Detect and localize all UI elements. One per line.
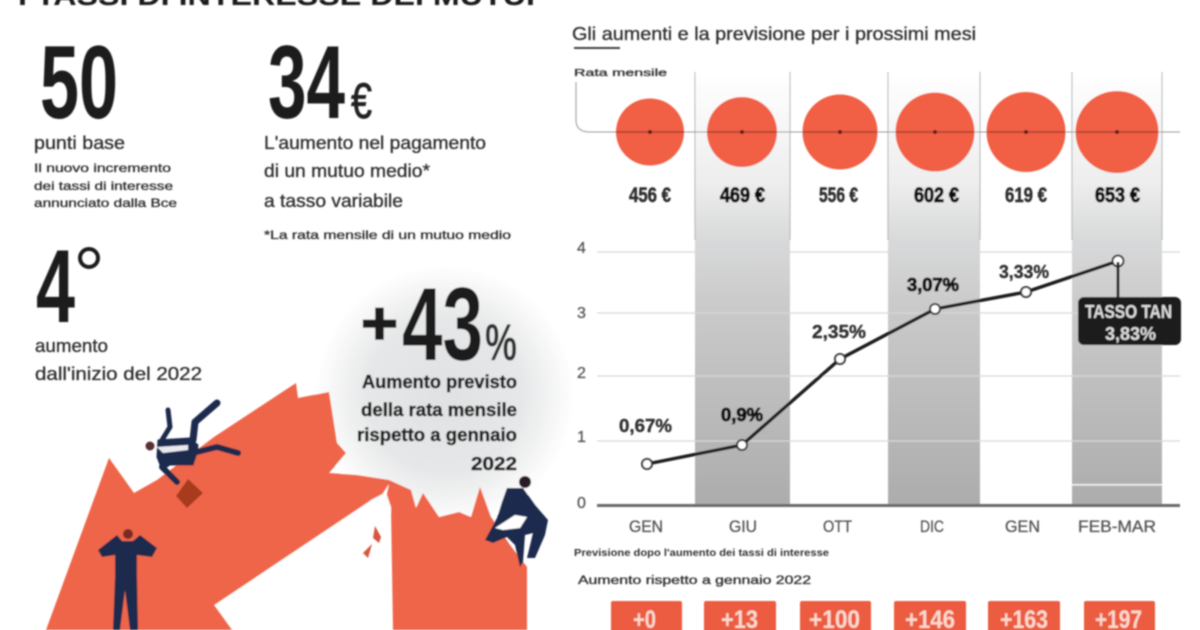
stat: 34 euro: L'aumento nel pagamento	[264, 133, 486, 153]
line chart: 2	[577, 365, 586, 382]
month labels: GEN	[629, 517, 663, 536]
stat: plus 43 percent: +	[361, 290, 398, 357]
line chart: 3,07%	[907, 275, 959, 295]
stat: 34 euro: a tasso variabile	[264, 191, 403, 211]
stat: plus 43 percent: 43	[402, 267, 483, 383]
stat: 50 basis points	[34, 25, 177, 210]
payment values: 556 €	[819, 184, 858, 207]
stat: 50 basis points: Il nuovo incremento	[34, 161, 171, 175]
payment values: 602 €	[914, 184, 959, 207]
line chart: 2,35%	[812, 322, 866, 342]
stat: 50 basis points: 50	[40, 25, 118, 141]
forecast note: Previsione dopo l'aumento dei tassi di interesse	[574, 547, 829, 559]
line chart: 0	[577, 495, 586, 512]
stat: plus 43 percent	[357, 267, 517, 474]
stat: 50 basis points: punti base	[34, 133, 125, 153]
icon: standing businessman	[98, 529, 157, 630]
line chart: 0,9%	[721, 405, 763, 425]
increase boxes	[611, 601, 1155, 630]
month labels: DIC	[920, 517, 944, 536]
icon: briefcase	[176, 479, 203, 508]
line chart: 3	[577, 305, 586, 322]
stat: plus 43 percent: %	[485, 314, 517, 372]
stat: plus 43 percent: rispetto a gennaio	[357, 425, 517, 445]
stat: fourth increase: aumento	[35, 336, 108, 356]
stat: 50 basis points: dei tassi di interesse	[34, 179, 173, 193]
callout: TAN rate	[1078, 262, 1181, 345]
payment values: 469 €	[720, 184, 765, 207]
stat: plus 43 percent: Aumento previsto	[362, 372, 517, 392]
stat: 34 euro	[264, 25, 511, 242]
month labels: GIU	[729, 517, 757, 536]
callout: TAN rate: 3,83%	[1105, 324, 1156, 344]
chart heading: Gli aumenti e la previsione per i prossimi mesi	[572, 24, 976, 44]
payment values	[629, 184, 1140, 207]
stat: 34 euro: 34	[268, 25, 345, 141]
line chart: 4	[577, 240, 586, 257]
column bands	[695, 72, 1162, 505]
month labels: OTT	[823, 517, 852, 536]
stat: 50 basis points: annunciato dalla Bce	[34, 196, 177, 210]
payment values: 456 €	[629, 184, 671, 207]
falling shards	[363, 484, 389, 558]
grey halo behind forecast	[315, 265, 575, 525]
month labels: FEB-MAR	[1078, 517, 1156, 536]
stat: fourth increase	[35, 229, 202, 384]
stat: plus 43 percent: della rata mensile	[361, 400, 517, 420]
icon: falling businessman	[146, 403, 238, 482]
monthly payment label: Rata mensile	[574, 68, 668, 79]
line chart: 0,67%	[619, 416, 672, 436]
line chart: 1	[577, 429, 586, 446]
red broken arrow	[46, 383, 527, 630]
panel: key figures and illustration	[18, 0, 575, 630]
stat: fourth increase: dall'inizio del 2022	[35, 364, 202, 384]
stat: fourth increase: 4	[36, 229, 75, 345]
month labels	[629, 517, 1156, 536]
line chart: 3,33%	[999, 262, 1049, 282]
month labels: GEN	[1005, 517, 1040, 536]
payment values: 619 €	[1005, 184, 1047, 207]
stat: 34 euro: *La rata mensile di un mutuo medio	[264, 228, 511, 242]
line chart	[577, 240, 1180, 512]
payment values: 653 €	[1095, 184, 1140, 207]
payment bubbles	[576, 82, 1180, 173]
stat: 34 euro: di un mutuo medio*	[264, 161, 430, 181]
icon: sitting businessman	[485, 476, 548, 567]
comparison note: Aumento rispetto a gennaio 2022	[578, 575, 811, 587]
stat: 34 euro: €	[351, 73, 372, 129]
panel: increases and forecast	[572, 24, 1181, 630]
callout: TAN rate: TASSO TAN	[1085, 302, 1172, 322]
stat: plus 43 percent: 2022	[471, 454, 517, 474]
